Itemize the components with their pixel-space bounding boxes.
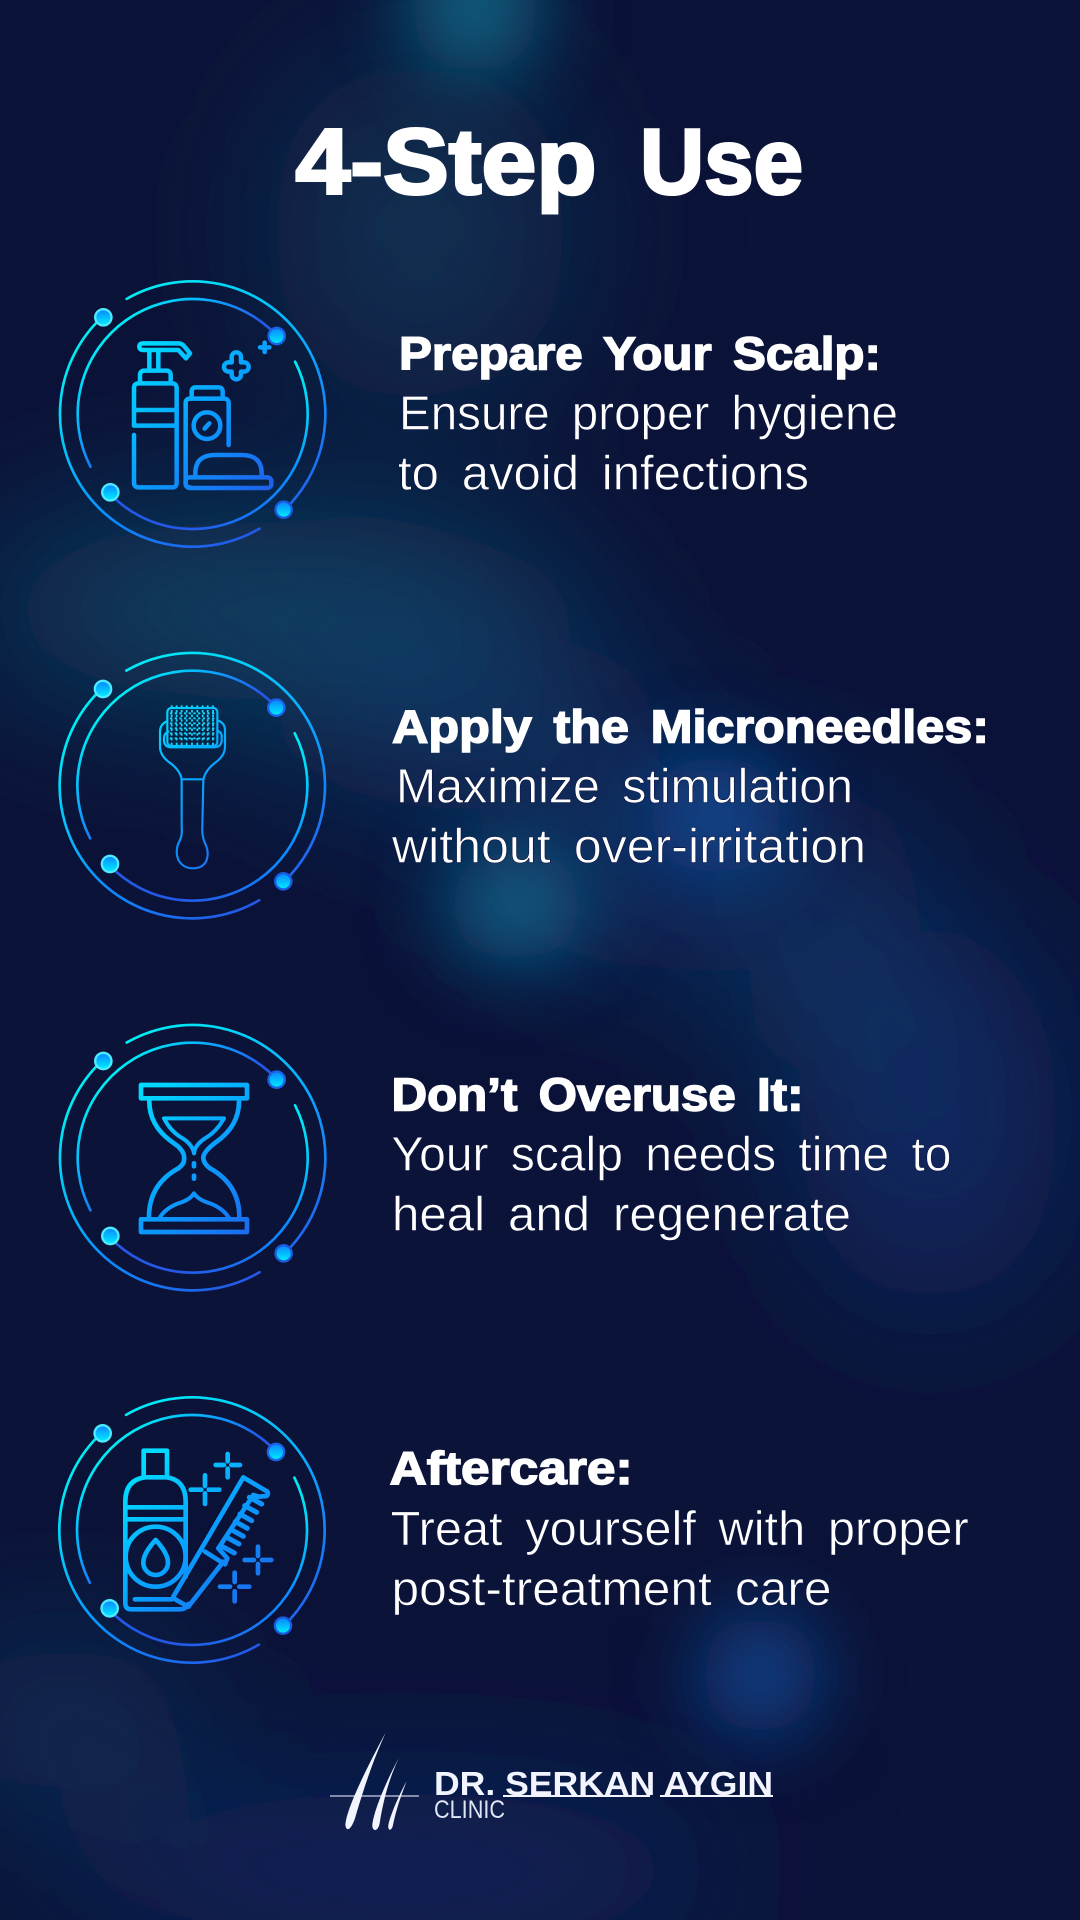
icon: hourglass in rings [60,1025,325,1290]
icon: derma roller in rings [60,653,325,918]
text: treat yourself with proper: Treat yourself with proper [391,1503,969,1556]
heading: aftercare: Aftercare: [390,1442,633,1494]
icon: logo hair strands [330,1733,419,1830]
text: your scalp needs time to: Your scalp needs time to [392,1129,952,1182]
heading: apply the microneedles: Apply the Microneedles: [392,701,989,753]
title: 4-Step [296,109,596,213]
panel: step 4 aftercare [59,1397,969,1663]
text: ensure proper hygiene: Ensure proper hygiene [399,387,898,440]
heading: don't overuse it: Don’t Overuse It: [392,1069,804,1121]
text: maximize stimulation: Maximize stimulation [396,761,853,814]
title [296,109,803,213]
text: without over-irritation: without over-irritation [391,821,866,874]
panel: step 2 apply the microneedles [60,653,989,918]
icon: bottle, comb and sparkles in rings [59,1397,325,1663]
text: heal and regenerate: heal and regenerate [392,1189,851,1242]
title: Use [640,109,803,213]
text: post-treatment care: post-treatment care [392,1563,832,1616]
logo underline [503,1795,773,1797]
icon: pump bottle, tube and soap in rings [60,281,325,547]
text: to avoid infections: to avoid infections [398,447,809,500]
panel: step 1 prepare your scalp [60,281,898,547]
panel: step 3 don't overuse it [60,1025,951,1290]
heading: prepare your scalp: Prepare Your Scalp: [399,327,881,379]
logo subtitle: CLINIC [434,1796,505,1824]
logo name: DR. SERKAN AYGIN [434,1765,773,1802]
logo: dr. serkan aygin clinic [330,1733,773,1830]
